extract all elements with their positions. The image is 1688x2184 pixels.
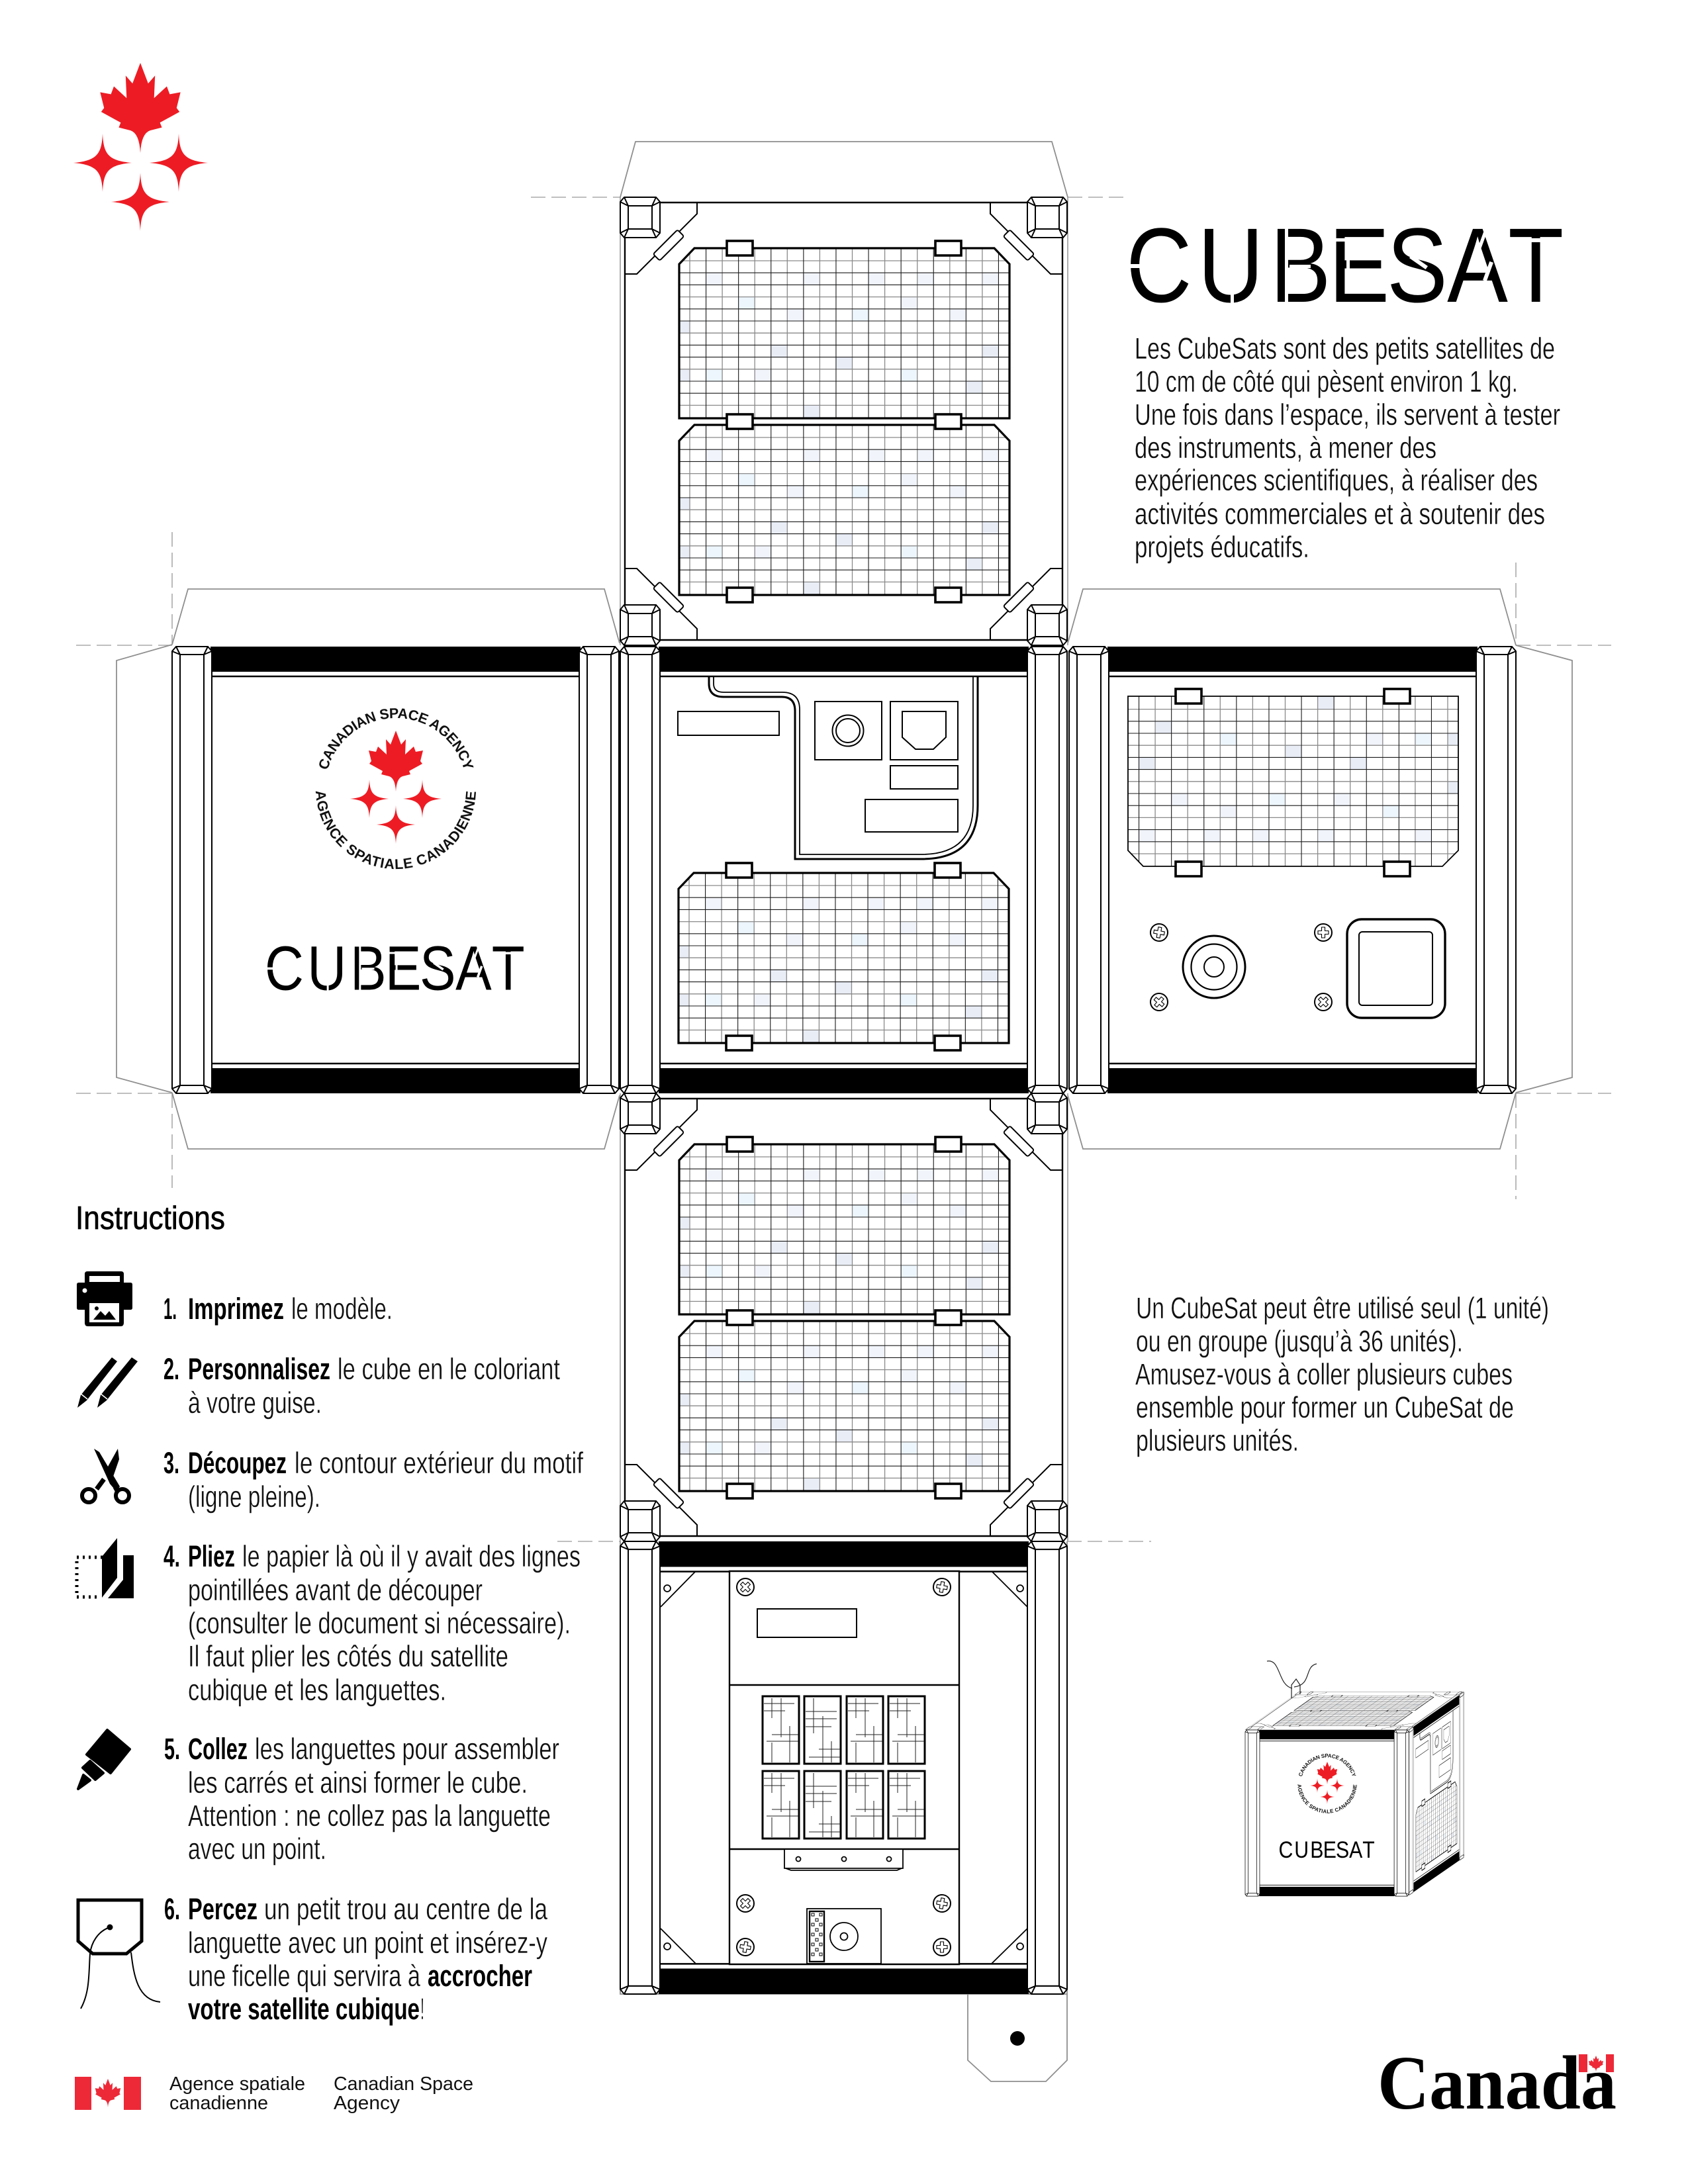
footer: Canada wordmark: Canada bbox=[1378, 2041, 1617, 2126]
connector bbox=[807, 1909, 881, 1964]
step 6: 6. bbox=[164, 1892, 180, 1926]
step 3: (ligne pleine). bbox=[188, 1480, 320, 1514]
step 5: les carrés et ainsi former le cube. bbox=[188, 1766, 528, 1799]
step 4: (consulter le document si nécessaire). bbox=[188, 1606, 571, 1640]
step 4 bbox=[164, 1539, 581, 1707]
cube side face bbox=[1409, 1692, 1464, 1895]
logo: round agency emblem: AGENCE SPATIALE CANADIENNE bbox=[315, 792, 477, 870]
step 6 bbox=[164, 1892, 548, 2026]
hanging tab hole bbox=[1010, 2031, 1025, 2046]
text block: multi-unit CubeSats: ou en groupe (jusqu’à 36 unités). bbox=[1136, 1324, 1463, 1358]
panel: right face with lens and sensor bbox=[1069, 647, 1516, 1093]
step 5: avec un point. bbox=[188, 1832, 326, 1866]
text block: multi-unit CubeSats: Amusez-vous à coller plusieurs cubes bbox=[1135, 1357, 1513, 1391]
wordmark: CUBESAT on left face: CUBESAT bbox=[265, 933, 525, 1003]
cube front face: AGENCE SPATIALE CANADIENNE bbox=[1297, 1784, 1357, 1813]
step 2 bbox=[164, 1352, 560, 1420]
panel: centre face with connectors bbox=[620, 647, 1067, 1093]
step 6: ! bbox=[420, 1992, 424, 2026]
circuit board bbox=[729, 1571, 959, 1964]
footer: Canadian flag signature bbox=[75, 2077, 141, 2110]
text block: multi-unit CubeSats bbox=[1135, 1291, 1549, 1457]
logo: round agency emblem: CANADIAN SPACE AGENCY bbox=[319, 708, 474, 769]
step 5: Collez bbox=[188, 1732, 248, 1766]
title: CUBESAT bbox=[1126, 206, 1564, 324]
icon: glue bottle bbox=[78, 1730, 130, 1789]
panel: lower solar face bbox=[620, 1093, 1068, 1541]
step 3 bbox=[164, 1446, 583, 1514]
step 5: Attention : ne collez pas la languette bbox=[188, 1799, 551, 1833]
step 1 bbox=[164, 1292, 393, 1326]
step 2: le cube en le coloriant bbox=[338, 1352, 560, 1386]
screws bbox=[1147, 923, 1335, 1014]
intro text block bbox=[1135, 332, 1560, 564]
footer: agency name bbox=[169, 2073, 473, 2114]
step 2: 2. bbox=[164, 1352, 179, 1386]
intro text block: expériences scientifiques, à réaliser des bbox=[1135, 463, 1538, 497]
text block: multi-unit CubeSats: Un CubeSat peut être utilisé seul (1 unité) bbox=[1136, 1291, 1549, 1325]
step 5 bbox=[164, 1732, 559, 1866]
footer: agency name: Agence spatiale bbox=[169, 2073, 305, 2095]
cube top face bbox=[1245, 1692, 1463, 1730]
intro text block: des instruments, à mener des bbox=[1135, 431, 1436, 465]
logo: round agency emblem bbox=[315, 708, 477, 870]
step 1: le modèle. bbox=[291, 1292, 393, 1326]
solar cells bbox=[763, 1696, 925, 1839]
panel: bottom face with board bbox=[620, 1541, 1067, 1994]
step 3: 3. bbox=[164, 1446, 179, 1480]
icon: pencils bbox=[77, 1357, 138, 1408]
intro text block: activités commerciales et à soutenir des bbox=[1135, 497, 1545, 531]
footer: agency name: Canadian Space bbox=[334, 2073, 473, 2095]
hanging tab and string bbox=[1267, 1661, 1317, 1698]
illustration: assembled cube bbox=[1244, 1661, 1464, 1897]
icon: scissors bbox=[82, 1449, 129, 1502]
step 3: Découpez bbox=[188, 1446, 287, 1480]
logo: agency maple leaf and stars bbox=[73, 63, 208, 231]
dashed fold guides bbox=[76, 197, 1611, 1541]
step 6: accrocher bbox=[428, 1959, 532, 1993]
step 1: 1. bbox=[164, 1292, 177, 1326]
step 4: le papier là où il y avait des lignes bbox=[242, 1539, 581, 1573]
footer: agency name: canadienne bbox=[169, 2093, 268, 2114]
icon: tag with string bbox=[78, 1900, 160, 2009]
footer: agency name: Agency bbox=[334, 2093, 400, 2114]
step 6: un petit trou au centre de la bbox=[264, 1892, 548, 1926]
text block: multi-unit CubeSats: plusieurs unités. bbox=[1136, 1424, 1299, 1457]
cube front face: CUBESAT bbox=[1278, 1837, 1375, 1863]
icon: printer bbox=[77, 1271, 132, 1326]
step 6: languette avec un point et insérez-y bbox=[188, 1926, 547, 1960]
cut-out flaps outline bbox=[117, 142, 1572, 2081]
step 1: Imprimez bbox=[188, 1292, 284, 1326]
step 5: 5. bbox=[164, 1732, 180, 1766]
heading: instructions: Instructions bbox=[75, 1201, 225, 1236]
sensor window bbox=[1347, 919, 1445, 1018]
step 5: les languettes pour assembler bbox=[255, 1732, 559, 1766]
intro text block: Les CubeSats sont des petits satellites de bbox=[1135, 332, 1555, 365]
panel: left face with logo bbox=[171, 646, 620, 1094]
panel: top face with solar arrays bbox=[620, 197, 1068, 645]
text block: multi-unit CubeSats: ensemble pour former un CubeSat de bbox=[1136, 1390, 1514, 1424]
lens bbox=[1183, 936, 1245, 998]
step 4: Il faut plier les côtés du satellite bbox=[188, 1639, 508, 1673]
step 2: à votre guise. bbox=[188, 1386, 322, 1420]
icon: fold bbox=[77, 1538, 134, 1598]
step 4: Pliez bbox=[188, 1539, 235, 1573]
corner brackets bbox=[661, 1571, 1027, 1964]
intro text block: projets éducatifs. bbox=[1135, 530, 1309, 564]
step 3: le contour extérieur du motif bbox=[295, 1446, 583, 1480]
step 4: 4. bbox=[164, 1539, 180, 1573]
bracket bbox=[784, 1850, 903, 1870]
solar array on right face bbox=[1128, 689, 1458, 876]
step 6: votre satellite cubique bbox=[188, 1992, 420, 2026]
intro text block: Une fois dans l’espace, ils servent à tester bbox=[1135, 398, 1560, 432]
step 2: Personnalisez bbox=[188, 1352, 330, 1386]
step 4: cubique et les languettes. bbox=[188, 1673, 446, 1707]
intro text block: 10 cm de côté qui pèsent environ 1 kg. bbox=[1135, 365, 1518, 398]
step 4: pointillées avant de découper bbox=[188, 1573, 483, 1607]
step 6: Percez bbox=[188, 1892, 258, 1926]
cube front face: CANADIAN SPACE AGENCY bbox=[1299, 1754, 1356, 1776]
cube front face bbox=[1244, 1730, 1409, 1897]
step 6: une ficelle qui servira à bbox=[188, 1959, 421, 1993]
